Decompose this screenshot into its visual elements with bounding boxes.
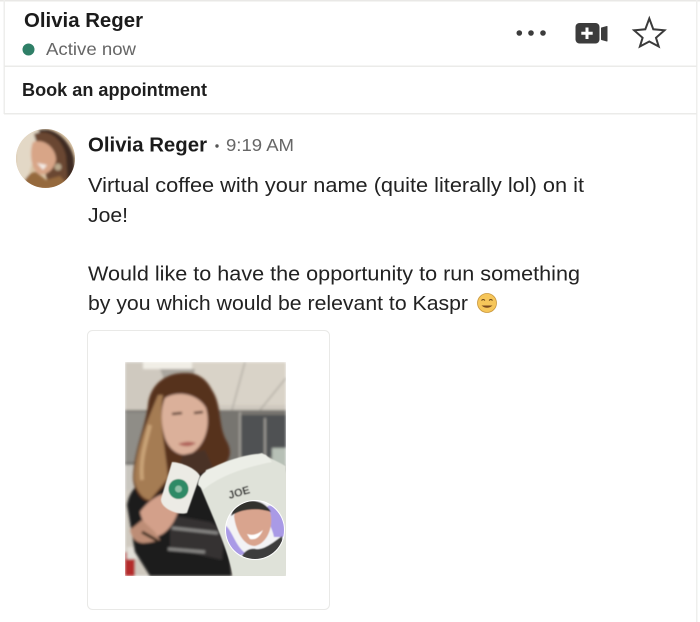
timestamp: 9:19 AM <box>226 135 294 155</box>
large paper cup <box>198 453 286 576</box>
icon: star <box>634 18 664 46</box>
status dot <box>22 44 34 56</box>
status text: Active now <box>46 39 136 59</box>
photo: woman holding coffee cups <box>125 362 286 576</box>
message body text: Joe! <box>88 204 128 227</box>
photo background: office <box>125 362 286 576</box>
image attachment card <box>88 330 330 610</box>
message body text <box>88 174 584 315</box>
avatar: sender photo <box>16 129 76 189</box>
contact name: Olivia Reger <box>24 10 143 32</box>
book an appointment link: Book an appointment <box>22 80 207 100</box>
message meta: sender and time <box>88 134 294 156</box>
icon: smiling emoji <box>478 294 496 312</box>
message body text: by you which would be relevant to Kaspr <box>88 292 468 315</box>
message body text: Virtual coffee with your name (quite literally lol) on it <box>88 174 584 197</box>
header action icons <box>516 18 664 46</box>
starbucks cup <box>161 462 200 514</box>
header: contact name and status <box>22 10 143 59</box>
cup name label: JOE <box>227 484 251 502</box>
message body text: Would like to have the opportunity to run something <box>88 262 580 286</box>
icon: more dots <box>516 30 546 36</box>
circular portrait of Joe <box>225 500 286 560</box>
icon: video call <box>576 23 607 44</box>
sender name: Olivia Reger <box>88 134 207 156</box>
separator dot <box>215 144 219 148</box>
woman figure <box>127 373 232 576</box>
